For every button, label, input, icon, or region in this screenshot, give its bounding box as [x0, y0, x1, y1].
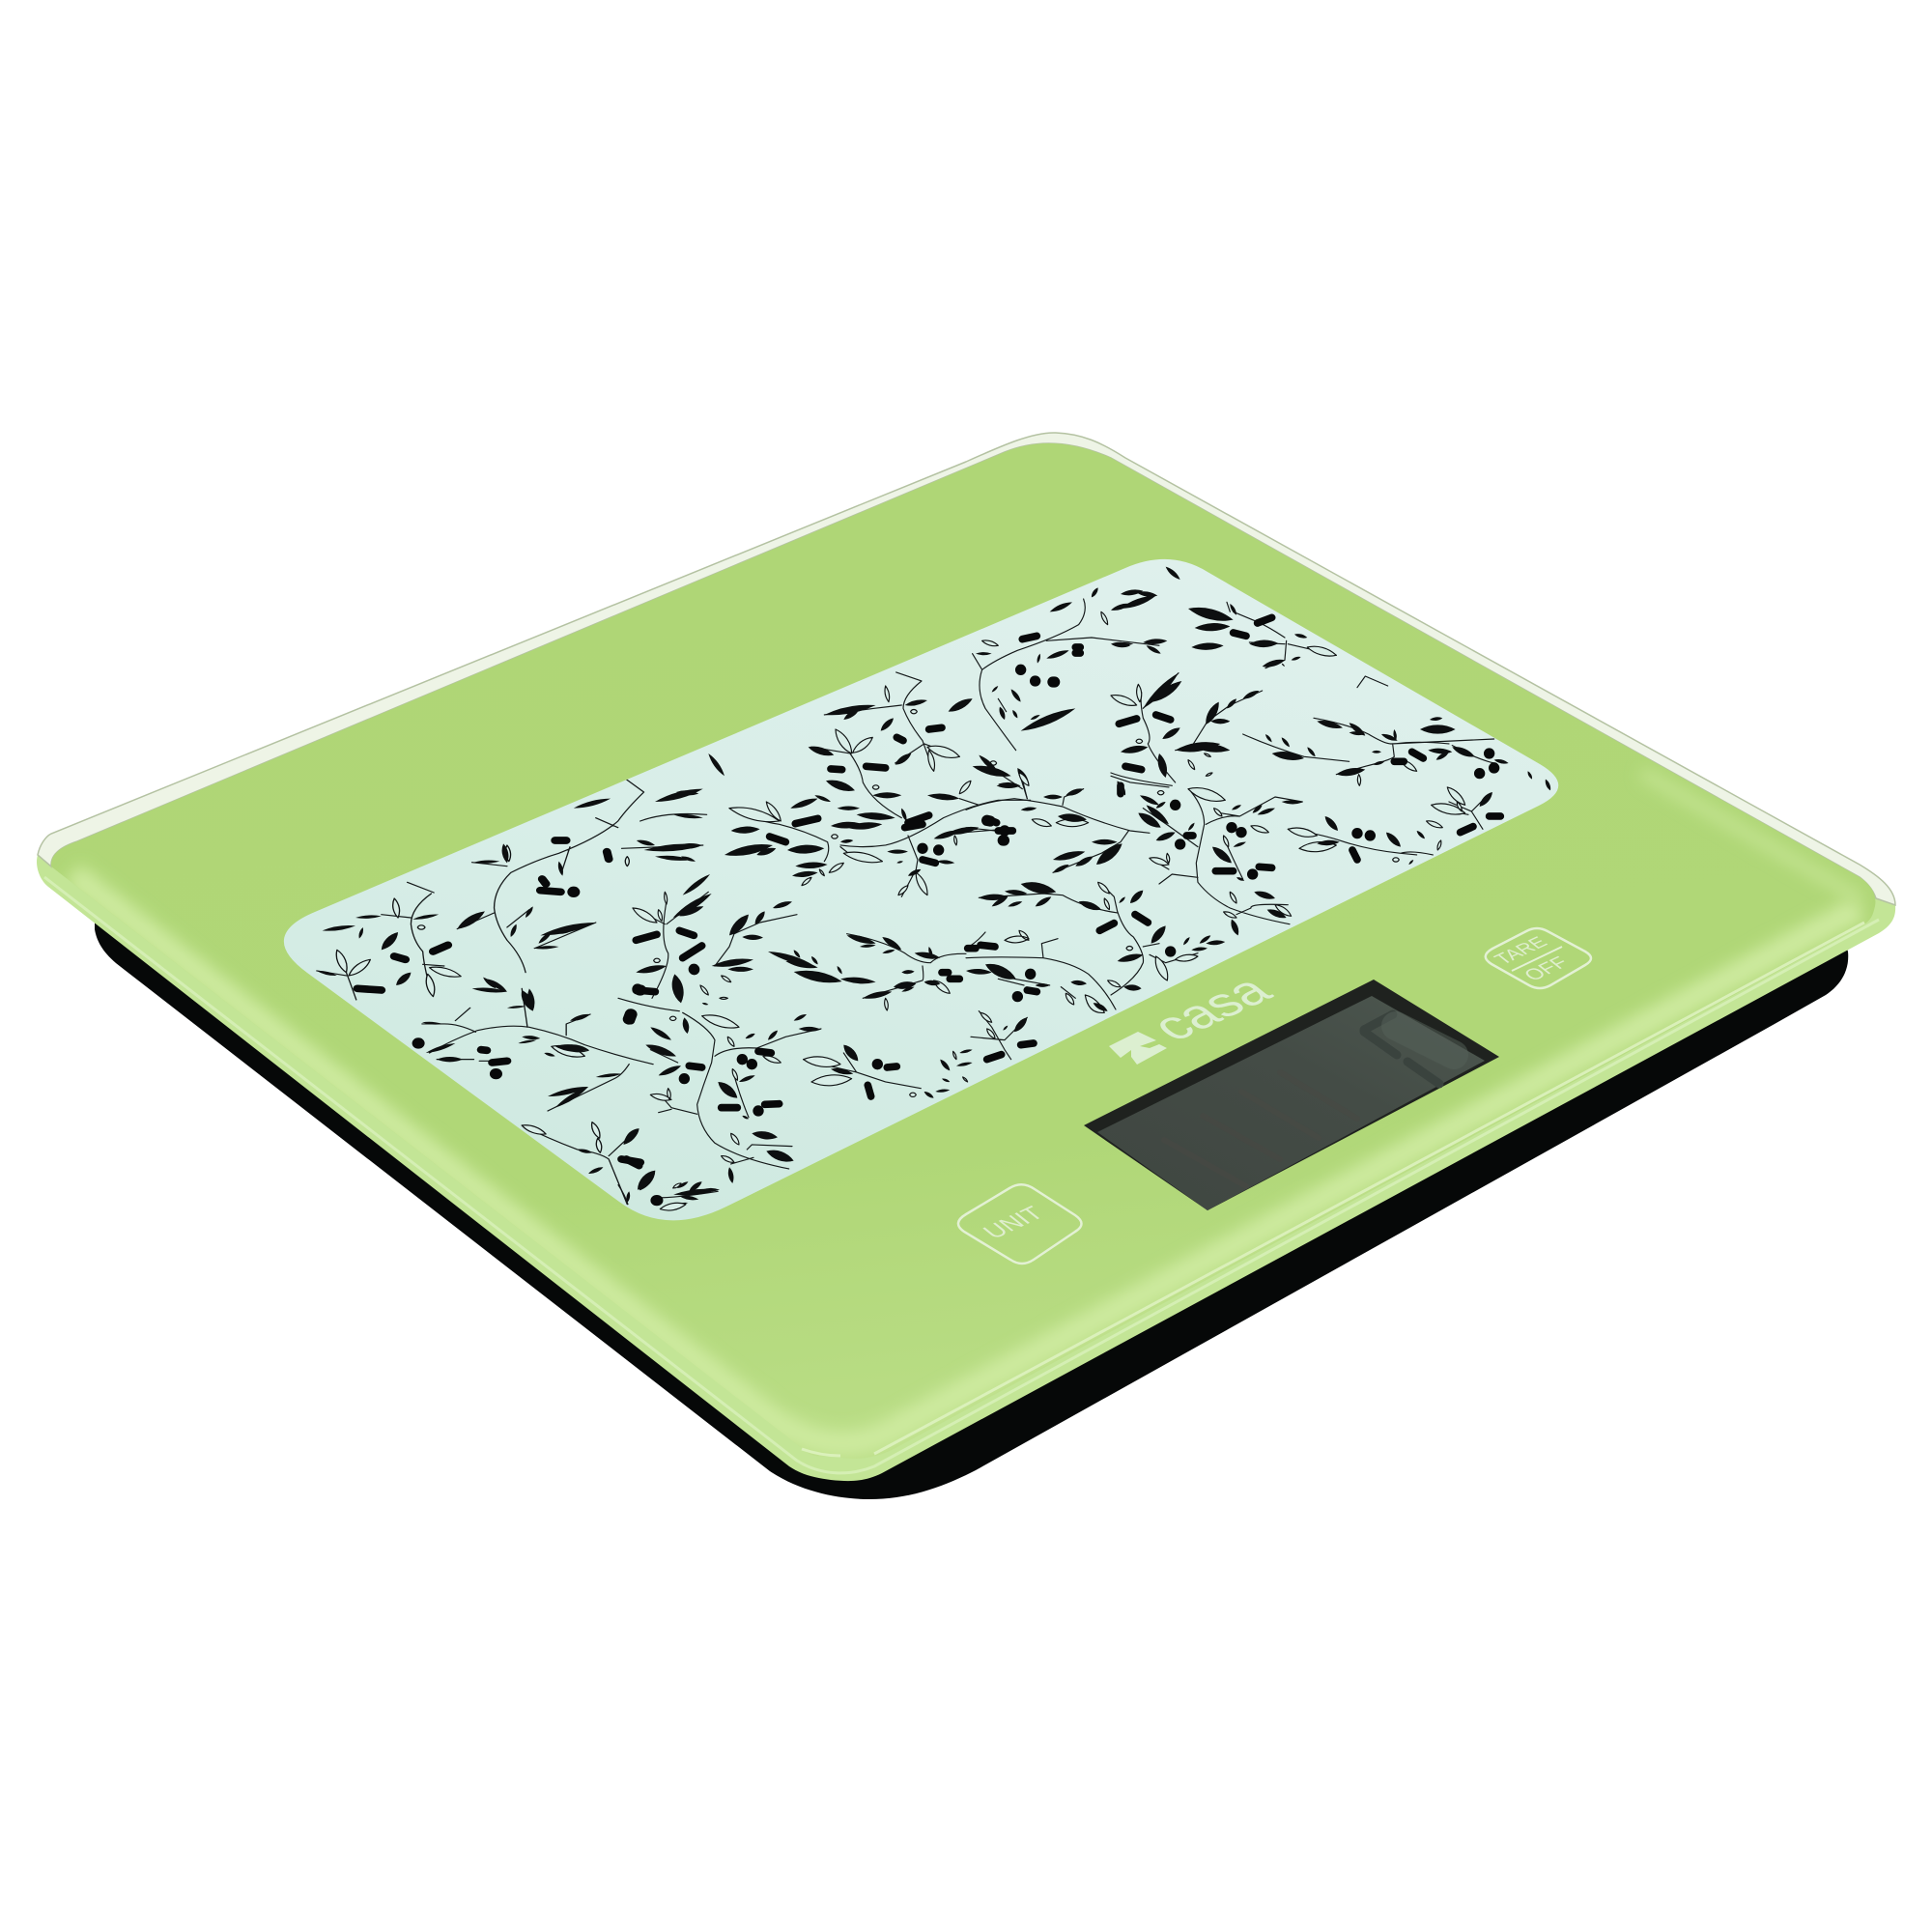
- LCD screen: [1097, 996, 1485, 1210]
- glass plate edge: [37, 433, 1895, 1481]
- lower lip ridge lines: [44, 877, 1879, 1473]
- TARE label: TARE: [1491, 934, 1552, 968]
- foliage: top right section: [1111, 567, 1550, 865]
- foliage: lower center section: [618, 874, 973, 1210]
- patterned white panel: [284, 559, 1558, 1220]
- bevel highlight lines: [802, 923, 1864, 1456]
- UNIT label: UNIT: [978, 1203, 1050, 1243]
- UNIT touch button: [958, 1184, 1082, 1264]
- LCD display window frame: [1084, 980, 1499, 1210]
- foliage: left section: [317, 776, 718, 1206]
- logo mark: [1109, 1032, 1167, 1065]
- kitchen scale product illustration: [37, 432, 1896, 1499]
- OFF label: OFF: [1520, 953, 1574, 984]
- black scale base: [95, 918, 1848, 1499]
- foliage: right center section: [966, 773, 1302, 1060]
- logo wordmark: casa: [1138, 967, 1284, 1049]
- green top surface: [51, 443, 1875, 1459]
- clear glass rim along the back edges: [38, 433, 1895, 905]
- olive branch pattern: [317, 567, 1550, 1210]
- casa logo: [1109, 967, 1284, 1065]
- TARE / OFF touch button: [1486, 928, 1591, 988]
- LCD faint digit segments: [1164, 1014, 1454, 1186]
- foliage: top center section: [676, 587, 1159, 896]
- soft highlight along the front bevels: [72, 773, 1860, 1443]
